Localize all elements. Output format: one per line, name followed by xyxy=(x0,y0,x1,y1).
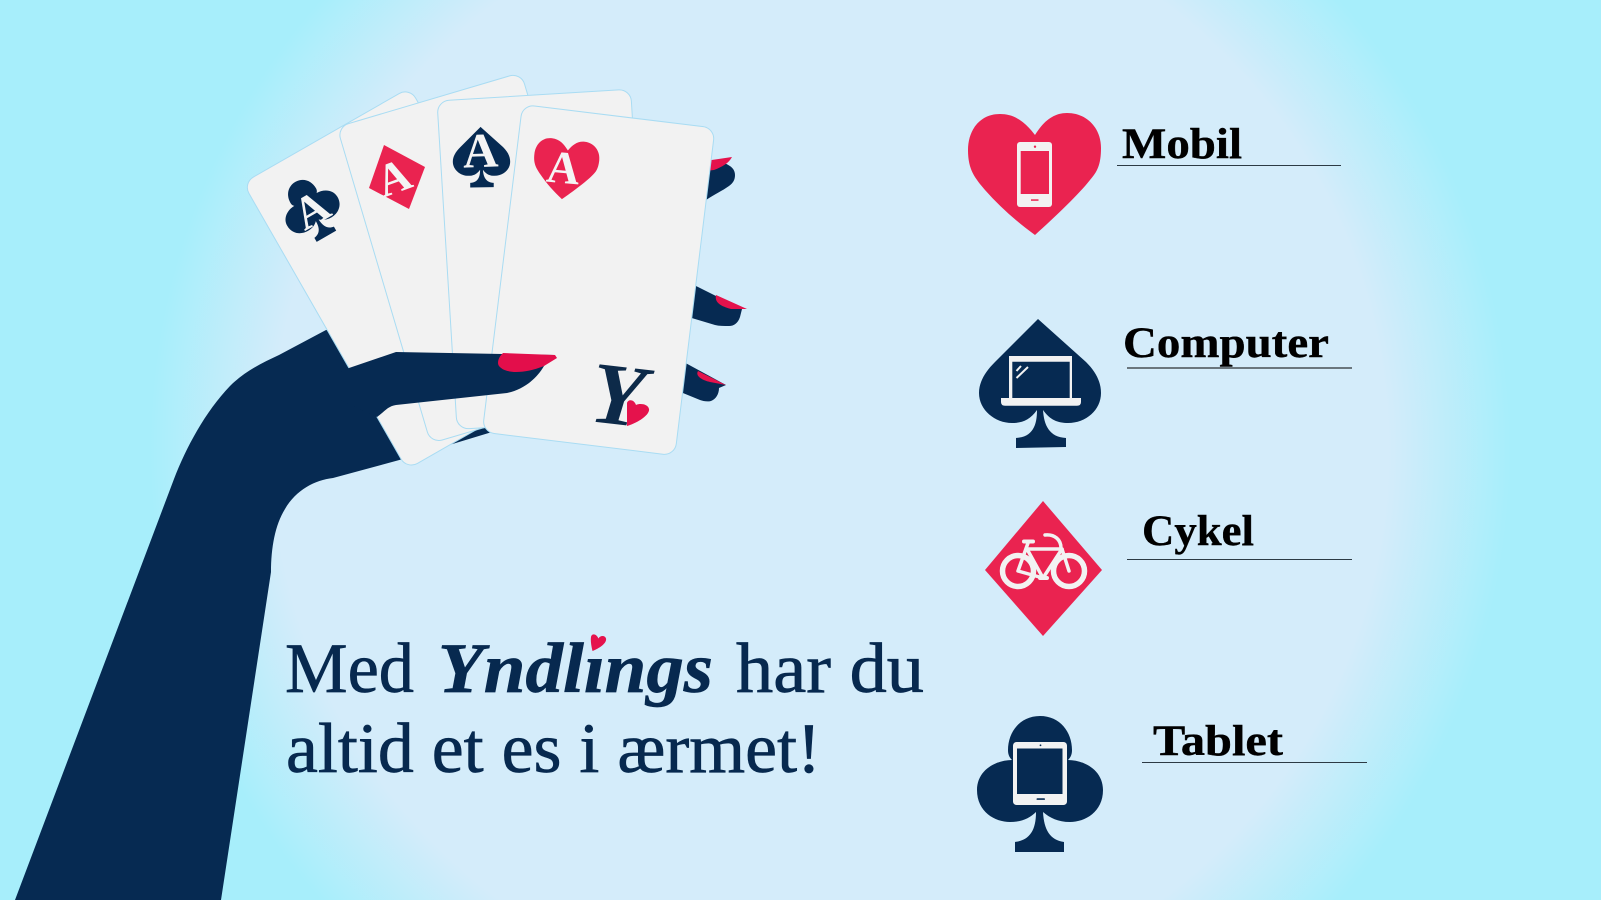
card: ace of clubs xyxy=(243,88,574,469)
headline: har du xyxy=(736,630,924,708)
item: Computer xyxy=(979,319,1352,448)
headline: altid et es i ærmet! xyxy=(286,710,821,788)
letter A: A xyxy=(545,141,582,194)
finger: top xyxy=(700,157,735,200)
thumb xyxy=(340,352,555,417)
headline: Med xyxy=(285,630,414,708)
label: Computer xyxy=(1123,320,1329,367)
finger: lower xyxy=(678,360,726,401)
headline xyxy=(285,630,924,788)
item: Mobil xyxy=(968,113,1341,235)
item: Tablet xyxy=(977,716,1367,852)
letter A: A xyxy=(462,122,500,179)
icon: diamond with bicycle xyxy=(985,501,1102,636)
card: ace of hearts with Y logo xyxy=(482,104,715,456)
icon: spade with laptop xyxy=(979,319,1101,448)
icon: club with tablet xyxy=(977,716,1103,852)
suit: club xyxy=(270,167,352,251)
heart over the i xyxy=(591,634,606,651)
thumb nail xyxy=(498,353,557,372)
label: Mobil xyxy=(1122,121,1242,168)
suit: heart xyxy=(529,136,601,203)
headline: Yndlings xyxy=(438,630,713,708)
item: Cykel xyxy=(985,501,1352,636)
card: ace of spades xyxy=(437,89,651,429)
label: Cykel xyxy=(1142,508,1254,555)
finger: middle xyxy=(685,283,747,326)
illustration: hand holding cards xyxy=(15,72,747,900)
suit: diamond xyxy=(369,145,425,209)
arm silhouette xyxy=(15,330,500,900)
letter A: A xyxy=(284,179,338,240)
card: ace of diamonds xyxy=(337,72,615,443)
label: Tablet xyxy=(1153,718,1284,765)
cover over the i dot xyxy=(592,639,608,655)
letter Y: Y xyxy=(586,345,657,448)
icon: heart with phone xyxy=(968,113,1101,235)
suit: spade xyxy=(453,127,510,188)
letter A: A xyxy=(369,148,418,207)
small heart xyxy=(627,400,649,426)
